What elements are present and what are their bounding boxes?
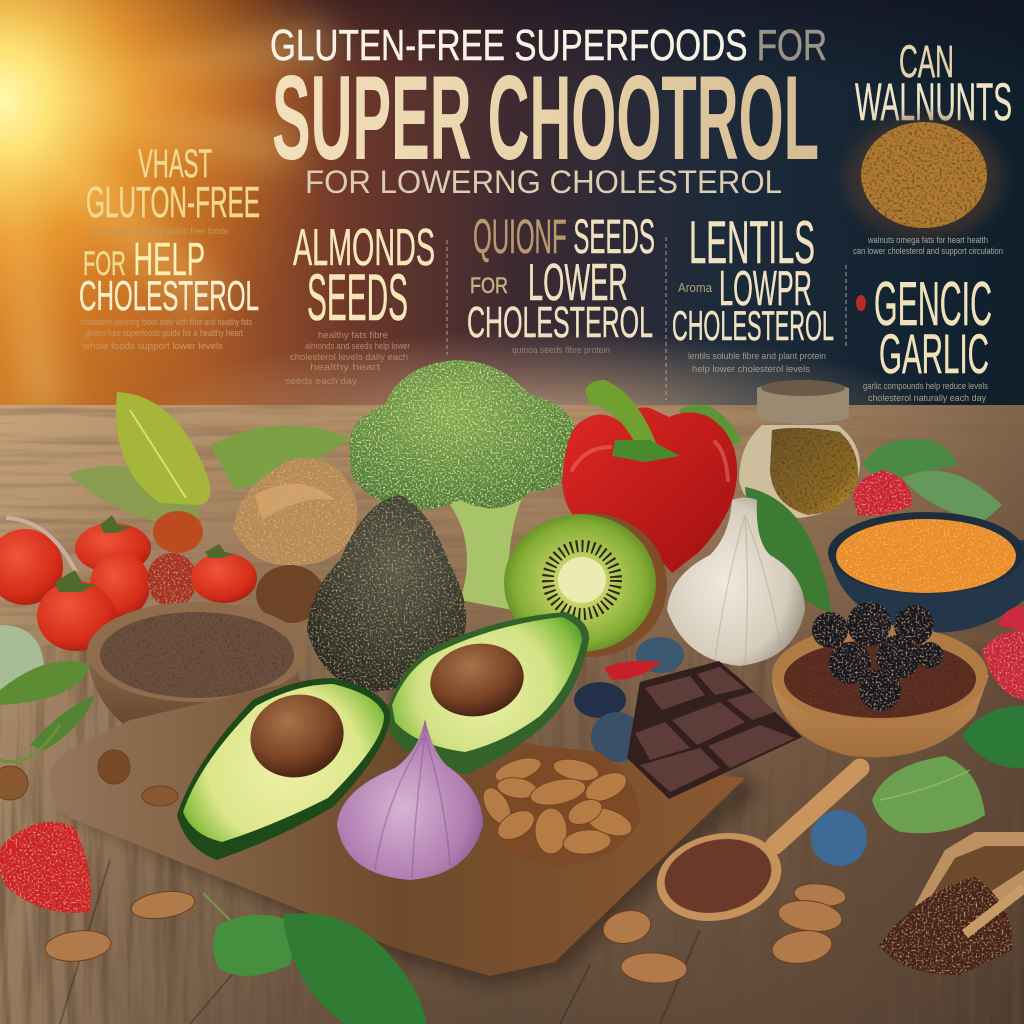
background: sunset backdrop	[0, 0, 1024, 410]
food: broccoli	[349, 360, 578, 610]
panel: genic garlic	[856, 270, 992, 403]
panel: what gluten-free: gluten-free superfoods guide for a healthy heart	[85, 328, 243, 338]
food: chia bowl	[87, 602, 307, 746]
food: lentil bowl	[828, 512, 1024, 633]
panel: what gluten-free: whole foods support lower levels	[82, 341, 224, 351]
panel: almonds seeds	[285, 219, 435, 386]
food: glass jar	[739, 380, 860, 518]
food: cutting board	[50, 680, 745, 976]
panel: what gluten-free	[79, 142, 260, 351]
panel: almonds seeds: ALMONDS	[293, 219, 435, 277]
food: cut avocado right	[388, 612, 589, 774]
panel: what gluten-free: CHOLESTEROL	[79, 272, 259, 319]
panel: lentils: Aroma	[678, 280, 713, 295]
panel: almonds seeds: healthy fats fibre	[318, 330, 388, 340]
panel: almonds seeds: seeds each day	[285, 376, 358, 386]
panel: can walnuts	[844, 36, 1012, 256]
food: potato / bread	[233, 458, 357, 623]
background: wooden table	[0, 405, 1024, 1024]
food: whole garlic	[667, 498, 805, 666]
food: loose almonds	[0, 750, 847, 985]
shadow: under cutting board	[60, 778, 760, 985]
panel: almonds seeds: healthy heart	[310, 362, 381, 372]
panel: quinoa seeds: LOWER	[528, 254, 628, 312]
panel: can walnuts: CAN	[899, 36, 954, 87]
panel: lentils	[672, 209, 834, 374]
food: strawberry	[0, 822, 91, 913]
title line 3: FOR LOWERNG CHOLESTEROL	[305, 164, 782, 200]
panel: quinoa seeds: CHOLESTEROL	[467, 298, 653, 347]
panel: almonds seeds: SEEDS	[307, 260, 408, 334]
food: right leaves and strawberry	[852, 439, 1002, 520]
panel: genic garlic: garlic compounds help reduce levels	[863, 381, 988, 391]
panel: quinoa seeds	[467, 211, 655, 355]
panel: lentils: LOWPR	[719, 262, 812, 316]
food: blueberry	[811, 810, 867, 866]
panel: what gluten-free: GLUTON-FREE	[86, 178, 260, 227]
food: kiwi	[504, 513, 667, 657]
panel: almonds seeds: almonds and seeds help lower	[305, 341, 410, 351]
food: spinach leaves front	[203, 893, 427, 1024]
food: whole dark avocado	[307, 495, 466, 692]
food: dark chocolate	[627, 661, 802, 799]
food: left leafy greens	[68, 392, 350, 530]
food: purple onion	[337, 719, 483, 880]
panel: lentils: LENTILS	[689, 209, 815, 276]
panel: quinoa seeds: quinoa seeds fibre protein	[512, 345, 610, 355]
food: almonds in dish	[477, 745, 640, 866]
divider lines	[447, 237, 846, 400]
food: right berries and spinach	[872, 606, 1024, 833]
food: left salad greens	[0, 625, 95, 762]
panel: what gluten-free: VHAST	[138, 142, 212, 186]
food: blue berries by chocolate	[574, 637, 684, 762]
food: berry flax bowl	[772, 602, 989, 757]
food: wooden spoon with seeds	[648, 768, 860, 932]
panel: what gluten-free: cholesterol lowering gluten free foods	[88, 226, 228, 236]
panel: quinoa seeds: FOR	[470, 273, 508, 298]
food: cut avocado left	[177, 678, 390, 860]
food: leaves behind pepper	[679, 404, 742, 450]
panel: what gluten-free: FOR HELP	[83, 233, 205, 285]
panel: lentils: CHOLESTEROL	[672, 302, 834, 349]
panel: genic garlic: cholesterol naturally each day	[868, 393, 986, 403]
panel: what gluten-free: cholesterol lowering foods daily with fibre and healthy fats	[80, 317, 252, 327]
food: tomatoes	[0, 511, 257, 651]
panel: lentils: lentils soluble fibre and plant protein	[688, 351, 826, 361]
panel: can walnuts: walnuts omega fats for heart health	[867, 235, 988, 245]
title	[270, 21, 827, 200]
title line 1: GLUTEN-FREE SUPERFOODS FOR	[270, 21, 827, 70]
food: large leaf by garlic	[745, 487, 832, 614]
panel: almonds seeds: cholesterol levels daily each	[290, 352, 408, 362]
icon: seed pile	[844, 116, 1004, 240]
panel: lentils: help lower cholesterol levels	[692, 364, 811, 374]
panel: quinoa seeds: QUIONF SEEDS	[473, 211, 655, 264]
food: scoop with seeds	[879, 832, 1024, 975]
food: red bell pepper	[562, 380, 737, 573]
